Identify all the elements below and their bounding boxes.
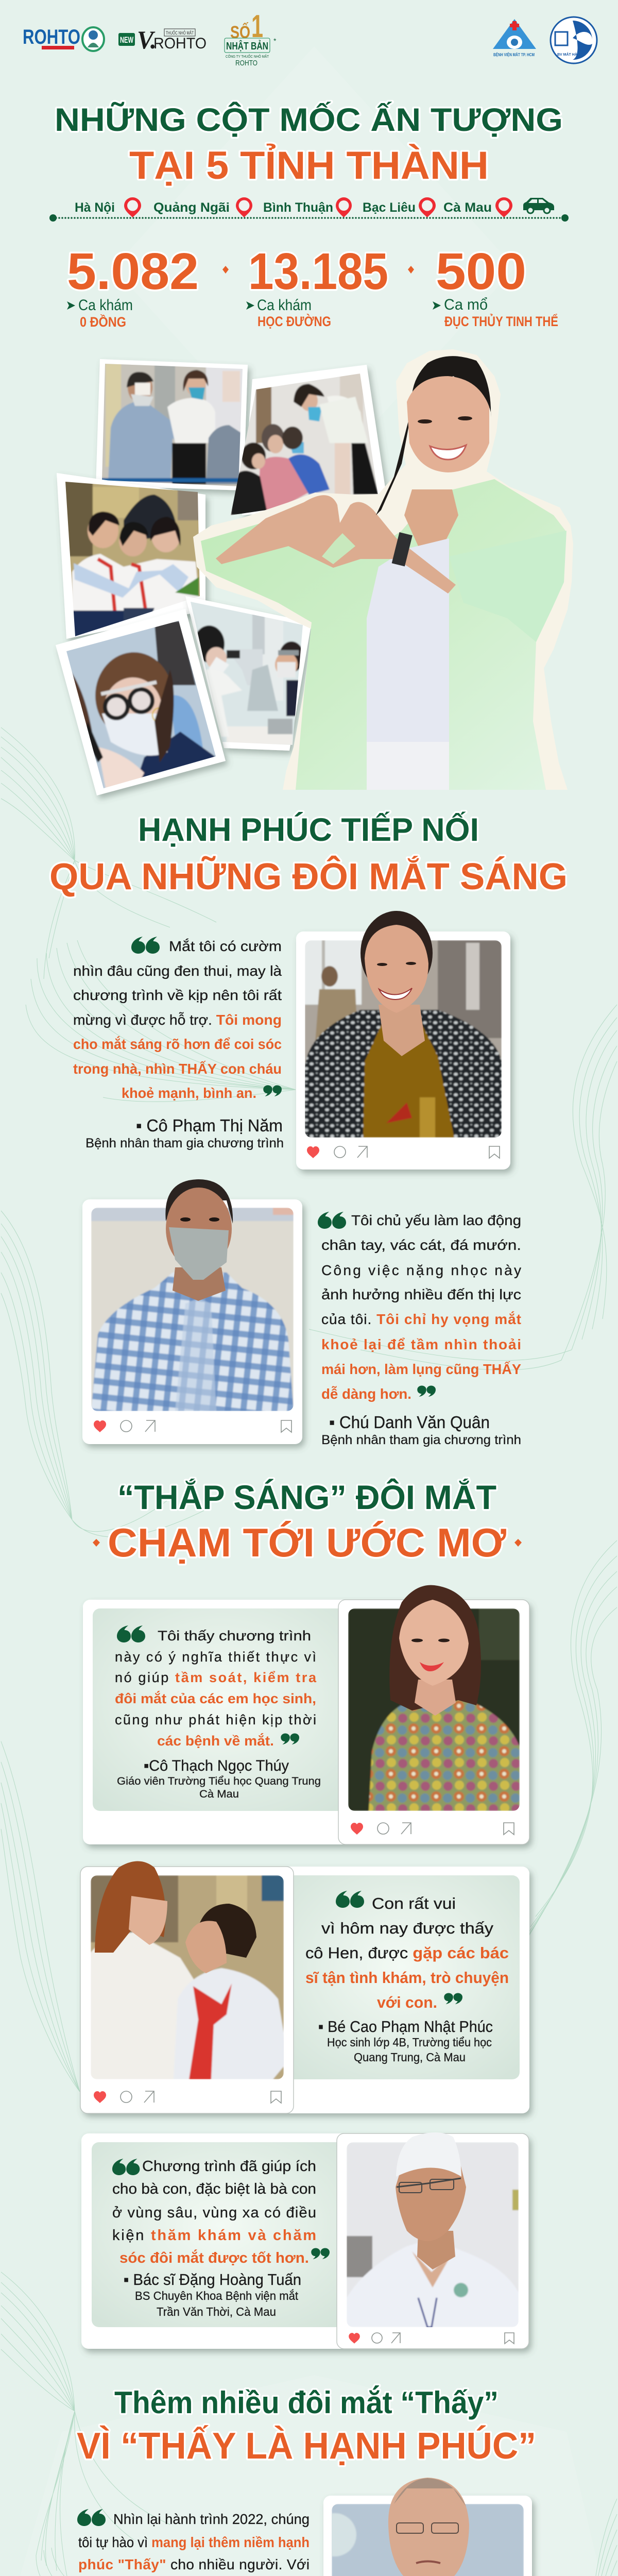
portrait photo [348,1585,520,1811]
quote text: chương trình về kịp nên tôi rất [73,987,282,1003]
quote text: này có ý nghĩa thiết thực vì [115,1649,316,1665]
quote text [73,937,284,1150]
stat: 13.185: 13.185 [248,243,388,300]
quote text: mừng vì được hỗ trợ. Tôi mong [73,1012,282,1028]
stat: 500 [433,243,558,329]
quote text: Học sinh lớp 4B, Trường tiểu học [327,2036,492,2049]
panel: testimonial Chú Danh Văn Quân [82,1179,521,1447]
quote text: Chương trình đã giúp ích [142,2158,316,2175]
stat: 500: Ca mổ [444,296,488,313]
logo: số 1 Nhật Bản: ROHTO [235,59,258,67]
portrait head [360,911,433,1056]
quote text: cũng như phát hiện kịp thời [115,1712,316,1727]
photo: ambassador making heart with hands [193,349,573,790]
quote text: Tôi thấy chương trình [158,1628,311,1643]
panel: testimonial Cô Thạch Ngọc Thúy [83,1585,529,1844]
portrait heads [95,1861,256,1973]
photo: patients waiting [227,365,386,518]
stat: 500: 500 [436,243,526,300]
quote text [112,2158,330,2318]
quote text: vì hôm nay được thấy [321,1919,494,1937]
quote text: ▪ Chú Danh Văn Quân [329,1413,490,1432]
post action icons [307,1146,500,1158]
heading: vì thấy là hạnh phúc: Thêm nhiều đôi mắt “Thấy” [114,2385,499,2420]
post card with portrait [313,2478,532,2576]
portrait head [396,2132,466,2269]
quote text: tôi tự hào vì mang lại thêm niềm hạnh [78,2534,310,2550]
quote text: phúc "Thấy" cho nhiều người. Với [78,2556,310,2572]
heading: hạnh phúc tiếp nối [49,811,568,897]
quote text: Cà Mau [199,1788,239,1800]
stat: 500: ĐỤC THỦY TINH THỂ [444,313,558,329]
photo: girl with trial glasses [56,609,226,795]
photo collage [56,349,573,795]
quote text: của tôi. Tôi chỉ hy vọng mắt [321,1311,521,1327]
heading: vì thấy là hạnh phúc [77,2385,536,2467]
quote text: kiện thăm khám và chăm [112,2227,316,2244]
quote text: với con. [377,1993,437,2011]
quote text: Bệnh nhân tham gia chương trình [321,1433,521,1447]
quote text: trong nhà, nhìn THẤY con cháu [73,1061,282,1077]
quote text: khoẻ lại để tầm nhìn thoải [321,1336,521,1352]
quote text: sĩ tận tình khám, trò chuyện [305,1969,509,1987]
route of 5 provinces [49,197,569,222]
quote text: Trần Văn Thời, Cà Mau [157,2305,276,2318]
quote text: ở vùng sâu, vùng xa có điều [112,2205,316,2221]
route of 5 provinces: Quảng Ngãi [153,200,230,215]
logo: Rohto: ROHTO [23,26,80,48]
quote text: ▪ Cô Phạm Thị Năm [136,1116,283,1135]
quote text: Bệnh nhân tham gia chương trình [85,1136,284,1150]
quote text: Giáo viên Trường Tiểu học Quang Trung [117,1775,321,1787]
quote text: Mắt tôi có cườm [169,938,282,954]
stat: 5.082: Ca khám [78,297,133,314]
title: TẠI 5 TỈNH THÀNH [129,144,489,188]
quote text: ▪ Bác sĩ Đặng Hoàng Tuấn [124,2270,301,2289]
heading: thắp sáng đôi mắt [93,1478,522,1565]
post action icons [94,1420,291,1432]
logo: Bệnh viện Mắt TP.HCM: BỆNH VIỆN MẮT TP. HCM [493,53,535,57]
logo: Bệnh viện Mắt Hà Nội [551,17,597,63]
quote text: Công việc nặng nhọc này [321,1262,521,1278]
panel: testimonial Ông Hirofumi Shiramatsu [77,2478,532,2576]
stat: 13.185: Ca khám [257,297,312,314]
stat: 13.185 [246,243,388,329]
quote text [115,1625,321,1800]
quote text: chân tay, vác cát, đá mướn. [321,1237,521,1253]
quote text: nó giúp tầm soát, kiểm tra [115,1670,317,1685]
quote text: Con rất vui [372,1894,456,1912]
panel: testimonial Cô Phạm Thị Năm [73,911,510,1170]
quote text: đôi mắt của các em học sinh, [115,1690,316,1706]
logo: V.Rohto: V. [137,25,157,54]
quote text: BS Chuyên Khoa Bệnh viện mắt [135,2289,299,2302]
logo: số 1 Nhật Bản: SỐ [230,22,250,42]
heading: vì thấy là hạnh phúc: VÌ “THẤY LÀ HẠNH PHÚC” [77,2425,536,2467]
logo: V.Rohto: ROHTO [153,35,207,52]
quote text: mái hơn, làm lụng cũng THẤY [321,1361,521,1377]
logo: V.Rohto: THUỐC NHỎ MẮT [166,30,194,36]
route of 5 provinces: Cà Mau [443,200,492,215]
quote text: cho mắt sáng rõ hơn để coi sóc [73,1036,282,1052]
quote text [318,1212,521,1447]
route of 5 provinces: Bạc Liêu [363,200,416,215]
photo: pupils reading leaflet [57,473,206,644]
header logos [23,9,597,67]
portrait head [165,1179,233,1301]
post action icons [351,1823,514,1835]
quote text: Quang Trung, Cà Mau [354,2050,466,2064]
logo: V.Rohto [118,25,207,54]
logo: số 1 Nhật Bản: 1 [251,9,263,44]
quote text [77,2509,310,2576]
logo: số 1 Nhật Bản: CÔNG TY THUỐC NHỎ MẮT [226,54,269,59]
post action icons [94,2091,281,2103]
heading: hạnh phúc tiếp nối: QUA NHỮNG ĐÔI MẮT SÁNG [49,856,568,897]
route of 5 provinces: Bình Thuận [263,200,333,215]
quote text: cô Hen, được gặp các bác [305,1944,509,1962]
photo: eye exam machine [185,596,312,752]
stat: 5.082: 0 ĐỒNG [80,314,126,330]
quote text: ảnh hưởng nhiều đến thị lực [321,1286,521,1302]
quote text: ▪ Bé Cao Phạm Nhật Phúc [318,2018,493,2036]
logo: V.Rohto: NEW [120,35,134,45]
panel: testimonial Bác sĩ Đặng Hoàng Tuấn [81,2132,529,2349]
post card with portrait [296,911,510,1170]
portrait head [389,1585,481,1716]
quote text: cho bà con, đặc biệt là bà con [112,2181,316,2197]
heading: hạnh phúc tiếp nối: HẠNH PHÚC TIẾP NỐI [138,811,479,848]
panel: testimonial Bé Cao Phạm Nhật Phúc [80,1861,529,2113]
heading: thắp sáng đôi mắt: CHẠM TỚI ƯỚC MƠ [108,1520,506,1565]
quote text [305,1891,509,2064]
logo: Bệnh viện Mắt Hà Nội: BV MẮT HÀ NỘI [557,52,585,57]
logo: số 1 Nhật Bản: * [273,37,277,45]
title [55,101,563,188]
stat: 5.082 [67,243,199,330]
key numbers [67,243,558,330]
title: NHỮNG CỘT MỐC ẤN TƯỢNG [55,101,563,138]
stat: 13.185: HỌC ĐƯỜNG [258,313,331,329]
portrait photo [347,2132,519,2327]
heading: thắp sáng đôi mắt: “THẮP SÁNG” ĐÔI MẮT [117,1478,496,1516]
quote text: khoẻ mạnh, bình an. [122,1085,256,1101]
quote text: dễ dàng hơn. [321,1386,411,1402]
logo: số 1 Nhật Bản: NHẬT BẢN [226,40,268,52]
portrait head [388,2478,469,2576]
portrait photo [91,1861,288,2079]
quote text: ▪Cô Thạch Ngọc Thúy [144,1757,289,1774]
logo: số 1 Nhật Bản [225,9,277,67]
stat: 5.082: 5.082 [67,243,199,300]
quote text: Nhìn lại hành trình 2022, chúng [113,2511,310,2527]
quote text: nhìn đâu cũng đen thui, may là [73,963,282,979]
post action icons [349,2333,514,2344]
route of 5 provinces: Hà Nội [75,200,115,215]
icon: car [523,198,554,213]
quote text: các bệnh về mắt. [157,1733,274,1749]
post card with portrait [82,1179,302,1444]
quote text: sóc đôi mắt được tốt hơn. [119,2249,309,2266]
photo: patient with eye patch [96,359,248,490]
logo: Bệnh viện Mắt TP.HCM [493,19,536,57]
quote text: Tôi chủ yếu làm lao động [351,1212,521,1228]
